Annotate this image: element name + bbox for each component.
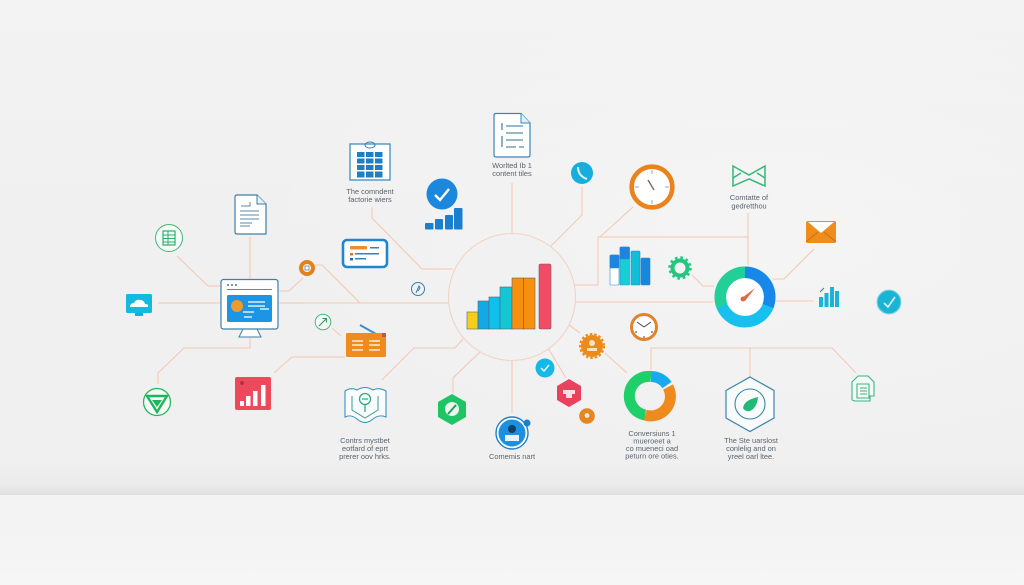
text: hexagon caption: yreel oarl ltee. [728,452,774,461]
icon: small orange gear [579,408,595,424]
text: donut caption: peturn ore oties. [625,452,679,460]
icon: small pin circle [412,282,424,296]
background floor [0,495,1024,585]
text: ribbon caption: gedretthou [731,202,767,210]
icon: conversions donut [629,376,670,416]
icon: bar group [610,247,650,285]
icon: green arrow circle [315,314,331,330]
icon: map with pin [345,388,386,422]
text: hexagon caption: conlelig and on [726,444,776,453]
icon: green ribbon [733,166,765,186]
icon: orange clock [632,167,672,207]
icon: small clock [632,314,656,340]
icon: orange envelope [806,221,836,243]
icon: orange ring [301,262,313,274]
icon: cloud monitor [126,294,152,316]
icon: red hexagon [557,379,581,407]
text: document caption: content tiles [492,169,532,178]
icon: calendar table [350,142,390,180]
text: person caption: Comemis nart [489,452,535,461]
text: document caption: Worlted Ib 1 [492,161,532,170]
icon: green gear [670,258,690,278]
text: map caption: prerer oov hrks. [339,452,391,461]
icon: phone circle [571,162,593,184]
text: calendar caption: The comndent [346,187,394,196]
icon: monitor dashboard [221,280,278,337]
text: donut caption: co mueneci oad [626,444,678,453]
connector lines [158,183,856,413]
text: ribbon caption: Comtatte of [730,193,768,202]
text: map caption: Contrs mystbet [340,436,390,445]
icon: orange card with pen [346,325,386,357]
icon: check with bars [425,178,462,230]
text: map caption: eotfard of eprt [342,444,388,453]
icon: hexagon shield [726,377,774,432]
icon: document [235,195,266,234]
icon: teal bar chart [819,287,839,307]
icon: gauge donut [720,272,770,322]
icon: green hexagon [438,394,466,425]
icon: teal check circle [877,290,901,314]
icon: blue person circle [496,417,530,449]
icon: red bar chart [235,377,271,410]
central hub: bar chart in circle [448,234,576,360]
text: donut caption: Conversiuns 1 [628,429,676,438]
icon: orange gear person [580,334,604,358]
icon: green document [852,376,874,401]
text: hexagon caption: The Ste uarslost [724,436,778,445]
icon: blue card [343,240,387,267]
icon: cyan check [536,358,554,378]
icon: list document [494,114,530,157]
icon: green table circle [156,224,182,252]
icon: green triangle circle [144,388,170,416]
text: calendar caption: factorie wiers [348,195,392,204]
text: donut caption: mueroeet a [633,436,672,446]
